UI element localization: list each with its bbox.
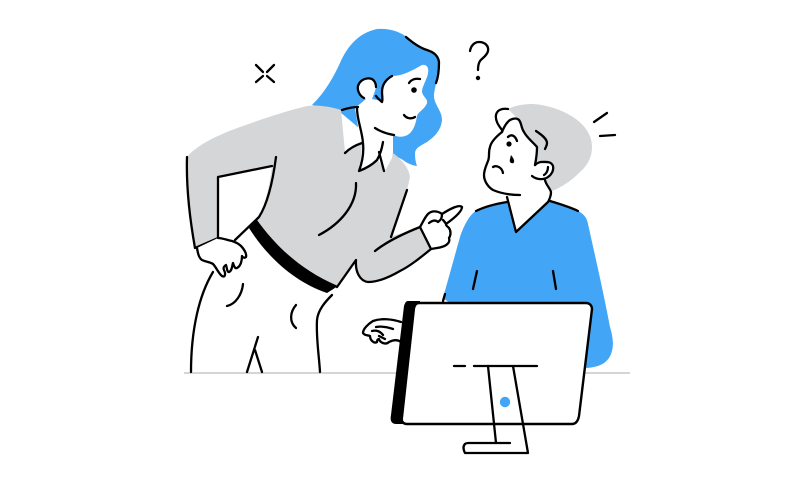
monitor screen bbox=[402, 303, 592, 424]
icon: question mark bbox=[470, 42, 488, 80]
woman face details bbox=[358, 37, 439, 135]
woman eye bbox=[411, 87, 417, 93]
woman collar bbox=[342, 107, 384, 171]
woman hair bbox=[312, 29, 442, 166]
man eye bbox=[506, 141, 512, 147]
woman belt bbox=[249, 220, 338, 293]
ground line bbox=[184, 372, 630, 374]
man hand bbox=[363, 319, 403, 343]
computer monitor bbox=[391, 301, 592, 453]
woman left hand on hip bbox=[197, 238, 246, 277]
woman figure bbox=[187, 29, 462, 372]
woman pants outline bbox=[191, 272, 332, 372]
woman face and neck bbox=[355, 65, 428, 171]
icon: surprise marks bbox=[594, 113, 615, 136]
monitor power dot bbox=[500, 397, 510, 407]
icon: sparkle cross bbox=[256, 65, 274, 82]
woman sweater bbox=[187, 106, 431, 293]
monitor stand bbox=[454, 366, 537, 453]
monitor black back edge bbox=[391, 301, 420, 424]
woman sweater lines bbox=[187, 157, 431, 287]
man face and head lines bbox=[443, 109, 578, 301]
man hair bbox=[508, 104, 592, 191]
man body bbox=[443, 200, 613, 368]
man figure bbox=[363, 104, 613, 368]
man tear bbox=[510, 155, 514, 163]
woman pointing hand bbox=[420, 206, 462, 250]
